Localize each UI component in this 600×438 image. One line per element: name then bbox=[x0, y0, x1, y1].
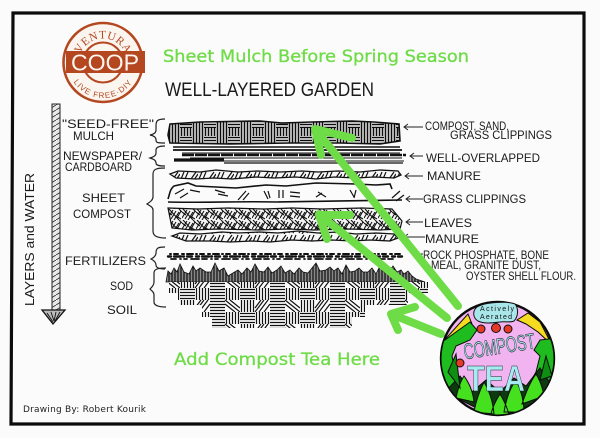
left labels: layer groups: COMPOST bbox=[73, 207, 132, 221]
icon: compost tea badge: Actively bbox=[480, 306, 514, 313]
left labels: layer groups: CARDBOARD bbox=[65, 160, 132, 174]
layer: manure lower bbox=[172, 231, 398, 242]
icon: compost tea badge bbox=[436, 302, 558, 420]
heading: Well-Layered Garden: WELL-LAYERED GARDEN bbox=[165, 80, 374, 101]
right labels with double-headed arrows: LEAVES bbox=[424, 216, 472, 230]
dark foliage base bbox=[449, 367, 549, 414]
badge lettering: COMPOST bbox=[462, 328, 537, 364]
layer: manure upper bbox=[170, 170, 401, 179]
left labels: layer groups bbox=[62, 117, 154, 317]
flowers bbox=[477, 325, 485, 333]
arrow: compost tea to sheet compost bbox=[319, 214, 447, 318]
bright leaves bbox=[456, 374, 544, 418]
left labels: layer groups: FERTILIZERS bbox=[65, 254, 146, 268]
left labels: layer groups: "SEED-FREE" bbox=[62, 117, 154, 131]
yellow corners bbox=[440, 313, 552, 346]
icon: compost tea badge: TEA bbox=[467, 358, 525, 399]
right labels with double-headed arrows: MANURE bbox=[425, 232, 479, 246]
heading: Add Compost Tea Here: Add Compost Tea Here bbox=[174, 350, 380, 370]
logo: Ventura Coop stamp: LIVE FREE·DIY bbox=[74, 79, 131, 98]
logo: Ventura Coop stamp bbox=[62, 22, 145, 104]
right labels with double-headed arrows: ROCK PHOSPHATE, BONE bbox=[423, 248, 549, 262]
layer: fertilizers bbox=[168, 254, 402, 259]
credit: Drawing By: Robert Kourik bbox=[23, 405, 147, 415]
braces bbox=[147, 119, 166, 307]
heading: Sheet Mulch Before Spring Season: Sheet Mulch Before Spring Season bbox=[163, 47, 469, 67]
layer: sod bbox=[166, 263, 425, 282]
left labels: layer groups: SHEET bbox=[82, 191, 126, 205]
right labels with double-headed arrows: COMPOST, SAND, bbox=[425, 119, 509, 133]
vertical label: layers and water: LAYERS and WATER bbox=[22, 173, 37, 306]
arrow: layers and water direction bbox=[42, 104, 65, 324]
right labels with double-headed arrows bbox=[404, 119, 576, 283]
layer: seed-free mulch bbox=[168, 121, 400, 144]
logo: Ventura Coop stamp: VENTURA bbox=[74, 30, 130, 51]
left labels: layer groups: SOIL bbox=[107, 303, 137, 317]
right labels with double-headed arrows: MANURE bbox=[427, 169, 481, 183]
left labels: layer groups: MULCH bbox=[73, 129, 114, 143]
layer: newspaper and cardboard bbox=[173, 147, 406, 163]
right labels with double-headed arrows: GRASS CLIPPINGS bbox=[450, 128, 552, 142]
activity bubble bbox=[474, 302, 518, 323]
right labels with double-headed arrows: OYSTER SHELL FLOUR. bbox=[466, 269, 576, 283]
layer: soil weave bbox=[169, 282, 428, 328]
right labels with double-headed arrows: GRASS CLIPPINGS bbox=[423, 192, 526, 206]
arrow: compost tea to mulch layer bbox=[315, 129, 458, 306]
right labels with double-headed arrows: MEAL, GRANITE DUST, bbox=[431, 258, 541, 272]
layer: grass clippings bbox=[168, 183, 404, 202]
left labels: layer groups: NEWSPAPER/ bbox=[63, 149, 143, 163]
left labels: layer groups: SOD bbox=[110, 279, 133, 293]
green foliage left bbox=[442, 321, 477, 392]
layer: leaves bbox=[168, 208, 402, 230]
arrow: compost tea to soil bbox=[391, 307, 441, 334]
right labels with double-headed arrows: WELL-OVERLAPPED bbox=[426, 151, 540, 165]
icon: compost tea badge: Aerated bbox=[480, 314, 512, 321]
green foliage right bbox=[532, 338, 554, 396]
logo: Ventura Coop stamp: COOP bbox=[71, 50, 139, 76]
